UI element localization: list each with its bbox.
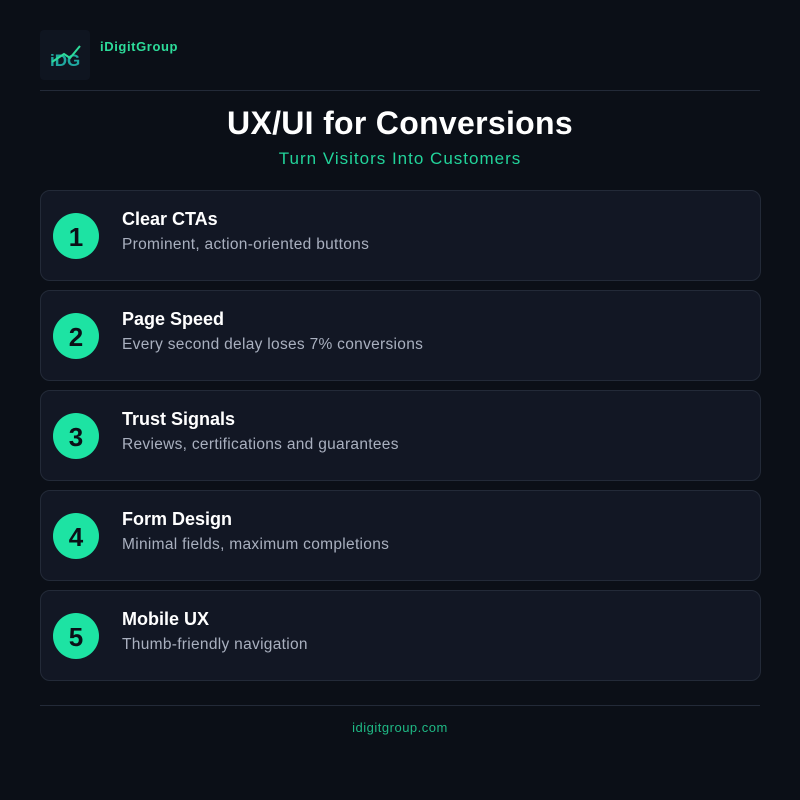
card 4: Form Design: [122, 509, 232, 529]
card 1: Clear CTAs: [122, 209, 218, 229]
card 3: 3: [69, 422, 83, 452]
card 3: Reviews, certifications and guarantees: [122, 436, 399, 453]
card 4: [40, 490, 761, 581]
card 3: Trust Signals: [122, 409, 235, 429]
card 5: Mobile UX: [122, 609, 209, 629]
card 5: [40, 590, 761, 681]
logo: iDG: [50, 51, 80, 70]
subtitle: Turn Visitors Into Customers: [279, 149, 521, 168]
brand name: iDigitGroup: [100, 39, 178, 54]
card 5: 5: [69, 622, 83, 652]
card 5: Thumb-friendly navigation: [122, 636, 308, 653]
card 3: [40, 390, 761, 481]
card 1: 1: [69, 222, 83, 252]
card 2: [40, 290, 761, 381]
logo: [40, 30, 90, 80]
card 2: Every second delay loses 7% conversions: [122, 336, 423, 353]
card 2: Page Speed: [122, 309, 224, 329]
title: UX/UI for Conversions: [227, 105, 573, 141]
card 4: Minimal fields, maximum completions: [122, 536, 389, 553]
card 1: Prominent, action-oriented buttons: [122, 236, 369, 253]
card 1: [40, 190, 761, 281]
card 4: 4: [69, 522, 83, 552]
card 2: 2: [69, 322, 83, 352]
footer: idigitgroup.com: [352, 720, 448, 735]
